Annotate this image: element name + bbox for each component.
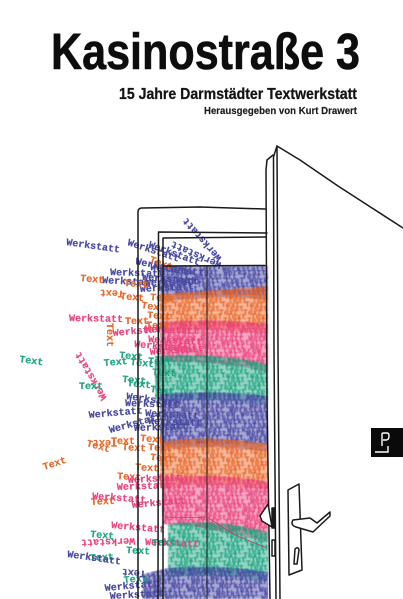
scattered words: green lower: Text [90,530,115,543]
band: green lower: Text Text Text Text Text Text Text Text Text [151,548,362,557]
scattered words: pink upper [69,313,204,402]
scattered words: pink lower: Werkstatt [131,495,186,512]
band: green upper: Text Text Text txeT Text Text Text Text Text [153,364,364,373]
scattered words: orange lower [42,434,175,509]
band: green lower: Text txeT Text Text Text Text Text Text Text [155,524,366,533]
scattered words: green lower: Text [126,546,150,558]
scattered words: orange lower: Text [135,463,159,475]
band: pink lower: Werkstatt Text Werkstatt Werkstatt Text [155,510,342,519]
band: green lower: Text txeT Text Text Text Text Text Text Text [150,560,361,569]
scattered words: green upper: Text [148,357,172,369]
band: pink upper: Werkstatt Werkstatt Werkstatt Werkstatt [147,351,334,360]
band: blue bottom: tatskreW Werkstatt Werkstatt Text Werkstatt [146,570,353,579]
band: blue bottom: Werkstatt Werkstatt tatskreW Werkstatt Text [143,578,350,587]
scattered words: orange upper: Text [80,274,105,287]
band: blue top: Werkstatt Text Werkstatt Text Werkstatt [149,281,336,290]
band: green lower: Text Text Text Text Text Text Text Text Text [150,520,361,529]
band: blue top: Werkstatt Text Werkstatt Werkstatt Text [150,265,337,274]
band: pink lower: Werkstatt Werkstatt Werkstatt Werkstatt [147,506,334,515]
band: blue bottom: Werkstatt Werkstatt Text Werkstatt Werkstatt [140,566,351,575]
scattered words: blue middle: Werkstatt [145,408,199,423]
scattered words: orange lower: Text [117,472,141,484]
scattered words: green lower [90,530,176,587]
band: blue middle: Text Werkstatt Text Werkstatt Werkstatt [153,434,340,443]
scattered words: orange upper: Text [147,311,171,323]
band: pink lower: Werkstatt Werkstatt Werkstatt Werkstatt [150,474,337,483]
scattered words: orange upper: Text [140,301,166,315]
band: green lower: Text Text Text Text Text Text Text Text Text [149,540,360,549]
band: pink lower [161,475,268,542]
band: green lower: Text Text Text Text Text Text Text Text Text [153,532,364,541]
band: pink upper: Werkstatt Werkstatt Text Werkstatt Text [153,331,340,340]
band: green upper: txeT Text Text Text Text Text Text txeT Text [149,372,360,381]
scattered words: pink upper: Werkstatt [148,334,202,349]
band: pink upper: Werkstatt Werkstatt Werkstatt Werkstatt [154,343,341,352]
band: pink lower: Text Werkstatt Werkstatt tatskreW Text [151,502,334,511]
band: pink upper: Werkstatt Text Werkstatt Werkstatt Text [149,339,336,348]
band: green upper: Text Text Text Text Text Text Text Text Text [147,384,358,393]
band: orange upper: Text Text txeT Text Text Text Text txeT Text [155,313,366,322]
band: pink upper: Text Werkstatt Werkstatt Text Werkstatt [155,323,342,332]
band: pink lower: Werkstatt Text Werkstatt Werkstatt Text [156,526,343,535]
scattered words: pink lower [81,472,199,551]
band: blue middle: Text Werkstatt Werkstatt Text Werkstatt [157,406,344,415]
door frame lines [138,207,267,599]
scattered words: pink upper: Werkstatt [112,323,167,340]
band: orange upper: Text Text Text Text Text Text Text Text Text [150,281,361,290]
band: blue middle: Text Werkstatt Werkstatt Werkstatt Text [151,418,338,427]
scattered words: orange lower: Text [42,456,68,474]
scattered words: green upper [18,351,176,398]
scattered words: blue upper: Werkstatt [140,281,194,296]
band: blue middle: Werkstatt Werkstatt Text Werkstatt Text [150,390,337,399]
band: pink lower: tatskreW Werkstatt Werkstatt Werkstatt [157,490,340,499]
scattered words: orange lower: Text [111,437,135,448]
scattered words: blue upper: Werkstatt [169,237,224,270]
band: pink lower: Text Werkstatt tatskreW Werkstatt Text [155,478,338,487]
band: orange lower: Text txeT Text Text Text Text Text txeT Text [155,440,366,449]
band: orange lower: txeT Text Text Text Text Text Text Text Text [154,460,365,469]
band: pink upper: Werkstatt Werkstatt Werkstatt Werkstatt [150,359,337,368]
band: blue bottom: Werkstatt Text Werkstatt Werkstatt Werkstatt [138,574,349,583]
band: green upper: Text Text Text Text Text Text Text Text Text [150,352,361,361]
band: pink lower: Text Werkstatt tatskreW Werkstatt Text [153,518,336,527]
scattered words: pink lower: Werkstatt [117,480,171,494]
band: orange lower: Text Text Text Text Text Text Text Text Text [150,436,361,445]
text mass: coloured bands [142,266,269,599]
scattered words: orange lower: Text [122,443,146,455]
scattered words: pink lower: Werkstatt [111,520,166,537]
scattered words: blue lower: Werkstatt [104,578,159,595]
scattered words: orange lower: Text [93,436,117,447]
band: green upper: Text Text Text Text Text Text Text Text Text [154,376,365,385]
band: orange upper: Text txeT Text Text Text Text Text Text Text [152,293,363,302]
scattered words: blue middle: Werkstatt [125,391,181,410]
band: blue middle: Werkstatt Text Werkstatt tatskreW Text [148,398,331,407]
scattered words: orange upper: Text [150,293,174,306]
band: orange upper [159,286,269,334]
band: pink lower: Werkstatt Werkstatt Werkstatt Werkstatt [148,482,335,491]
band: blue top: tatskreW Text Werkstatt Text Werkstatt [156,269,339,278]
band: orange lower [159,438,269,490]
scattered words: blue upper [65,215,225,296]
band: green upper [154,354,269,404]
scattered words: blue upper: Werkstatt [145,276,199,290]
band: green lower: Text Text txeT Text Text Text Text Text Text [154,544,365,553]
scattered words: orange lower: Text [148,443,172,455]
band: green upper: Text Text Text Text Text Text Text Text Text [148,360,359,369]
band: pink upper: Werkstatt Werkstatt Werkstatt Werkstatt [150,319,337,328]
band: orange upper: Text Text Text Text txeT Text Text Text Text [148,289,359,298]
band: green lower: Text Text Text Text txeT Text Text Text Text [148,528,359,537]
scattered words: pink lower: Werkstatt [145,537,199,551]
band: pink lower: Werkstatt Text Werkstatt Werkstatt Text [153,486,340,495]
scattered words: blue lower: Werkstatt [66,549,122,568]
band: green lower: Text Text Text Text Text txeT Text Text Text [147,552,358,561]
band: blue middle: Werkstatt Werkstatt Werkstatt Text Text [148,438,335,447]
scattered words: pink upper: Werkstatt [145,324,199,338]
scattered words: pink upper: Werkstatt [69,313,123,326]
band: pink lower: Werkstatt Werkstatt Text Werkstatt Text [149,494,336,503]
scattered words: blue upper: Werkstatt [126,237,181,265]
scattered words: orange upper: Text [100,286,124,298]
scattered words: blue middle: Werkstatt [148,416,202,430]
band: orange lower: Text Text Text Text Text Text Text Text Text [149,456,360,465]
scattered words: pink upper: Werkstatt [149,343,204,359]
scattered words: blue upper: Werkstatt [142,272,196,288]
band: blue top: Werkstatt Werkstatt Text Werkstatt Text [155,285,342,294]
band: pink lower: Werkstatt Werkstatt Werkstatt Werkstatt [148,522,335,531]
band: blue top: Text Werkstatt Werkstatt Text Werkstatt [151,289,338,298]
scattered words: green lower: Text [152,538,176,550]
editor line: Herausgegeben von Kurt Drawert [204,105,357,117]
scattered words: green upper: Text [122,375,147,388]
scattered words: blue lower [66,549,164,599]
band: blue bottom: Werkstatt Werkstatt Text Werkstatt tatskreW [139,586,346,595]
band: orange upper: Text Text Text Text Text Text Text Text Text [149,301,360,310]
scattered words: blue upper: Werkstatt [147,239,201,269]
band: blue middle: Werkstatt Werkstatt Text Werkstatt Text [154,414,341,423]
band: orange upper: Text Text txeT Text Text Text Text Text Text [154,285,365,294]
band: pink lower: Werkstatt Werkstatt Werkstatt Werkstatt [150,514,337,523]
scattered words: green upper: Text [150,385,175,398]
scattered words: green upper: Text [103,357,128,370]
band: pink upper: Werkstatt Text Werkstatt Werkstatt Text [155,355,342,364]
scattered words: blue upper: Werkstatt [102,275,156,290]
scattered words: green upper: Text [130,358,155,371]
door latch [260,504,275,556]
scattered words: pink upper: Werkstatt [134,339,189,356]
band: blue bottom: Werkstatt Text Werkstatt Werkstatt Werkstatt [144,590,355,599]
open door edge [266,146,403,599]
scattered words: orange lower: Text [85,439,111,456]
band: orange upper: txeT Text Text Text Text txeT Text Text Text [153,305,364,314]
scattered words: green lower: Text [90,553,114,565]
scattered words: green upper: Text [79,382,103,393]
band: blue middle: Werkstatt Text Werkstatt Werkstatt Text [155,426,342,435]
scattered words: pink lower: Werkstatt [81,534,135,548]
band: green lower: Text Text Text Text Text Text Text Text Text [155,556,366,565]
subtitle: 15 Jahre Darmstädter Textwerkstatt [119,86,357,103]
scattered words: green upper: Text [18,355,44,369]
scattered words: blue middle: Werkstatt [108,411,163,437]
scattered words: blue middle [88,391,202,437]
publisher logo [371,428,403,457]
scattered words: blue middle: Werkstatt [134,421,188,435]
band: orange lower: Text Text txeT Text Text Text Text Text Text [153,448,364,457]
scattered words: orange lower: Text [150,453,175,466]
band: orange lower: Text Text Text Text Text Text Text Text Text [150,476,361,485]
band: orange lower: Text Text Text Text txeT Text Text Text Text [151,464,362,473]
band: pink upper: Text Werkstatt tatskreW Werkstatt Text [151,347,334,356]
band: orange upper: Text Text Text Text Text Text Text Text Text [147,309,358,318]
scattered words: orange upper: Text [124,279,148,291]
scattered words: orange upper: Text [148,255,174,274]
scattered words: green upper: Text [127,379,152,392]
band: orange upper: Text Text Text Text Text Text Text Text Text [151,317,362,326]
band: pink lower: Werkstatt Werkstatt Werkstatt Werkstatt [154,498,341,507]
band: green upper: Text Text Text Text Text Text Text Text Text [150,392,361,401]
band: orange upper: Text Text Text Text Text Text txeT Text Text [156,297,367,306]
band: orange lower: Text Text Text txeT Text Text Text txeT Text [155,472,366,481]
scattered words: green upper: Text [119,351,144,364]
scattered words: orange upper: Text [103,323,114,347]
band: blue middle: tatskreW Werkstatt Werkstatt Werkstatt [155,394,338,403]
band: blue middle: Werkstatt Werkstatt tatskreW Werkstatt [147,422,330,431]
scattered words: blue upper: Werkstatt [150,262,205,280]
band: green upper: Text txeT Text Text Text Text txeT Text Text [155,356,366,365]
scattered words: blue upper: Werkstatt [65,237,121,256]
scattered words: orange lower: Text [140,434,165,447]
band: orange lower: Text Text Text Text Text Text Text Text Text [148,444,359,453]
scattered words: blue middle: Werkstatt [88,405,143,422]
band: green upper: Text Text txeT Text Text Text Text Text Text [151,380,362,389]
scattered words: orange upper: Text [120,292,145,305]
scattered words: pink upper: Werkstatt [73,349,110,402]
band: green lower [167,522,268,582]
band: pink upper: Werkstatt tatskreW Werkstatt Werkstatt [148,327,331,336]
band: blue middle: Werkstatt Werkstatt Werkstatt Werkstatt [150,430,337,439]
door handle [288,484,330,575]
scattered words: orange lower: Text [91,497,115,509]
band: blue middle: Werkstatt Werkstatt Werkstatt Werkstatt [153,402,340,411]
scattered words: green lower: Text [123,574,148,587]
band: orange lower: Text Text Text Text Text txeT Text Text Text [157,452,368,461]
band: orange upper: Text txeT Text Text Text Text Text Text Text [149,321,360,330]
band: green upper: Text Text Text Text Text Text Text Text Text [157,368,368,377]
band: green lower: txeT Text Text Text Text Text txeT Text Text [157,536,368,545]
scattered words: orange upper: Text [125,317,149,328]
band: blue top: Text Werkstatt txeT Werkstatt Werkstatt [153,277,340,286]
band: green lower: Text Text Text Text Text Text Text Text Text [153,564,364,573]
scattered words: pink lower: Werkstatt [128,472,182,487]
scattered words: pink lower: Werkstatt [92,491,146,507]
band: green upper: Text Text Text Text txeT Text Text Text Text [155,388,366,397]
scattered words: green upper: Text [152,368,176,380]
scattered words: blue upper: Werkstatt [110,267,164,281]
scattered words: orange upper [80,255,174,347]
band: blue bottom: Text Werkstatt Werkstatt Werkstatt Werkstatt [147,582,358,591]
band: blue middle [159,392,269,452]
scattered words: blue middle: Werkstatt [125,398,179,412]
band: blue middle: Werkstatt tatskreW Werkstatt Werkstatt [149,410,332,419]
band: pink upper [159,320,269,372]
scattered words: blue lower: Text [121,565,146,578]
scattered words: blue upper: Werkstatt [181,215,225,263]
band: green lower: Text Text Text txeT Text Text Text Text Text [148,568,359,577]
band: blue top [160,266,269,302]
band: pink upper: tatskreW Werkstatt Werkstatt Werkstatt [157,335,340,344]
band: orange lower: Text Text Text Text Text Text Text Text Text [147,468,358,477]
scattered words: orange upper: Text [146,321,170,333]
band: blue bottom [142,566,269,599]
scattered words: blue upper: Werkstatt [134,256,189,279]
band: blue top: Werkstatt Werkstatt Text Werkstatt Text [146,273,333,282]
